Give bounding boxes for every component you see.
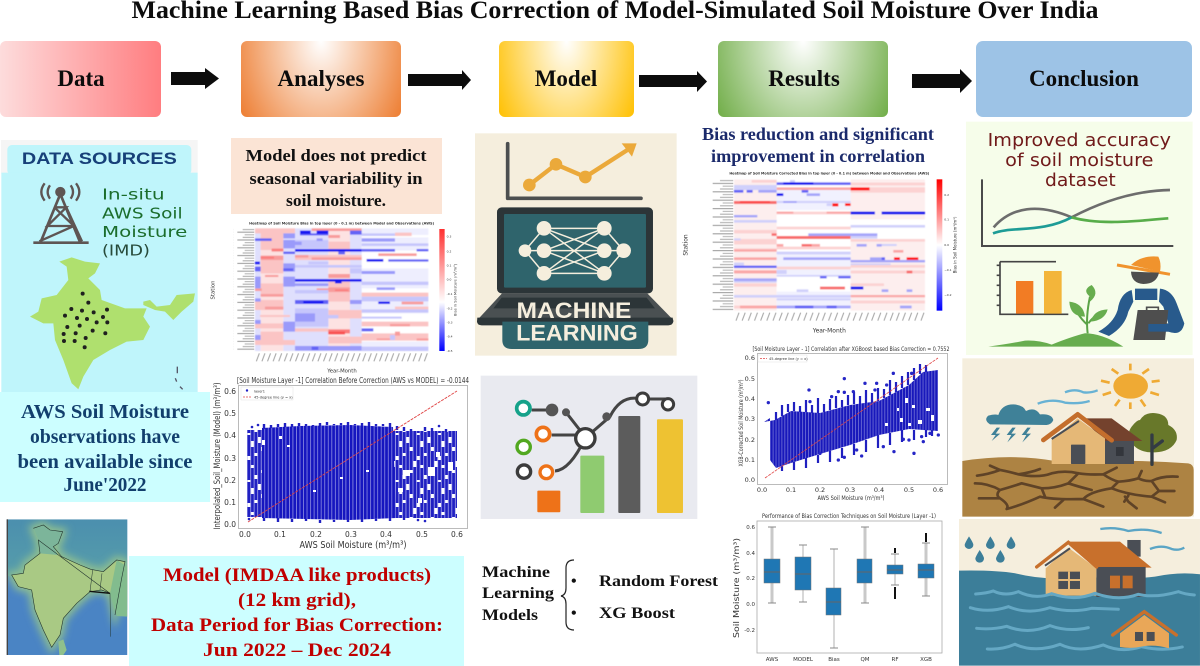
text: machine learning models list: Machine xyxy=(482,564,550,581)
arrow: Model to Results xyxy=(639,71,707,92)
text: machine learning models list: Learning xyxy=(482,585,554,602)
scatter: before correction: [Soil Moisture Layer -1] Correlation Before Correction (AWS vs MODEL) = -0.0144 xyxy=(237,376,469,385)
text panel: AWS availability: AWS Soil Moisture xyxy=(21,402,189,423)
illustration: ML network and bars xyxy=(481,376,697,519)
arrow: Results to Conclusion xyxy=(912,69,972,93)
heatmap: bias before correction: Station xyxy=(210,281,216,299)
header: Data: Data xyxy=(57,66,105,91)
icon: plant xyxy=(988,285,1123,347)
text: improved accuracy: dataset xyxy=(1045,171,1116,191)
scatter: before correction: 0.5 xyxy=(224,409,236,418)
scatter: after XGBoost correction: 0.1 xyxy=(786,486,796,494)
heatmap: bias before correction: 0.3 xyxy=(447,235,451,239)
scatter: before correction: 0.5 xyxy=(416,530,428,539)
heatmap: corrected bias: 0.0 xyxy=(944,243,949,247)
panel: data sources xyxy=(1,140,198,393)
scatter: after XGBoost correction: 0.1 xyxy=(745,456,755,464)
text: machine learning models list: Models xyxy=(482,607,538,624)
illustration: flood scene xyxy=(959,519,1200,666)
heatmap: bias before correction: -0.2 xyxy=(447,306,453,310)
heading: data sources: DATA SOURCES xyxy=(22,149,177,168)
text panel: AWS availability: been available since xyxy=(18,452,193,473)
scatter: before correction: 0.3 xyxy=(224,454,236,463)
callout: model seasonal variability xyxy=(231,138,442,214)
heatmap: corrected bias: Bias in Soil Moisture (m³/m³) xyxy=(953,216,958,273)
icon: flooded house large xyxy=(1037,540,1152,597)
icon: flooded house small xyxy=(1113,612,1176,648)
header: Conclusion xyxy=(976,41,1192,117)
text: in-situ AWS: Moisture xyxy=(102,223,187,241)
heatmap: corrected bias: 0.2 xyxy=(944,193,949,197)
box plot: bias correction performance: MODEL xyxy=(793,657,814,663)
scatter: before correction: 0.2 xyxy=(224,476,236,485)
header: Model xyxy=(499,41,634,117)
box plot: bias correction performance: AWS xyxy=(766,657,779,663)
scatter: after XGBoost correction: 0.0 xyxy=(745,476,755,484)
scatter: after XGBoost correction: 45-degree line (y = x) xyxy=(769,357,808,361)
header: Results: Results xyxy=(768,66,840,91)
icon: storm cloud xyxy=(986,404,1053,442)
scatter: after XGBoost correction: AWS Soil Moisture (m³/m³) xyxy=(818,494,884,502)
text panel: model description: Jun 2022 – Dec 2024 xyxy=(203,640,392,661)
text: in-situ AWS xyxy=(102,185,187,260)
heatmap: bias before correction: Bias in Soil Moisture (m³/m³) xyxy=(454,263,458,316)
text: machine learning models list: Random Forest xyxy=(599,573,719,590)
heatmap: corrected bias: −0.1 xyxy=(944,268,952,272)
heatmap: bias before correction: 0.1 xyxy=(447,263,451,267)
heatmap: bias before correction: Year-Month xyxy=(326,368,357,374)
box plot: bias correction performance: XGB xyxy=(920,657,932,663)
text: machine learning models list xyxy=(482,560,719,630)
icon: sun xyxy=(1101,364,1160,409)
text: machine learning models list: • xyxy=(571,573,577,590)
scatter: after XGBoost correction: 0.3 xyxy=(745,415,755,423)
text: results heading: improvement in correlation xyxy=(711,146,925,166)
text panel: AWS availability: June'2022 xyxy=(64,475,146,496)
icon: wind lines xyxy=(1038,390,1098,404)
scatter: before correction: 0.4 xyxy=(224,431,236,440)
heatmap: bias before correction: -0.5 xyxy=(447,349,453,353)
text panel: AWS availability xyxy=(0,392,210,502)
panel: improved accuracy conclusion xyxy=(966,122,1193,355)
heatmap: bias before correction: -0.4 xyxy=(447,335,453,339)
text: machine learning models list: XG Boost xyxy=(599,605,676,622)
heatmap: corrected bias: Year-Month xyxy=(812,328,846,335)
header: Model: Model xyxy=(535,66,597,91)
scatter: after XGBoost correction: 0.4 xyxy=(745,395,755,403)
scatter: before correction: 0.1 xyxy=(224,498,236,507)
scatter: before correction: 0.6 xyxy=(224,387,236,396)
box plot: bias correction performance: 0.6 xyxy=(746,525,755,531)
scatter: after XGBoost correction: 0.0 xyxy=(757,486,767,494)
icon: laptop with neural network: LEARNING xyxy=(516,321,638,346)
scatter: before correction: 0.2 xyxy=(310,530,322,539)
header: Results xyxy=(718,41,888,117)
bar chart xyxy=(997,262,1068,314)
icon: tree xyxy=(1129,413,1177,464)
header: Analyses: Analyses xyxy=(278,66,364,91)
scatter: after XGBoost correction: [Soil Moisture Layer - 1] Correlation after XGBoost based Bias Correction = 0.7552 xyxy=(752,345,950,353)
arrow: Data to Analyses xyxy=(171,68,219,89)
scatter: after XGBoost correction: 0.2 xyxy=(745,436,755,444)
icon: tower xyxy=(33,183,89,243)
box plot: bias correction performance: RF xyxy=(892,657,898,663)
water ripples xyxy=(970,591,1194,650)
text: improved accuracy: Improved accuracy xyxy=(988,131,1171,151)
scatter: before correction: 0.3 xyxy=(345,530,357,539)
heatmap: corrected bias: −0.2 xyxy=(944,293,952,297)
text: in-situ AWS: (IMD) xyxy=(102,242,150,260)
text panel: model description xyxy=(129,556,464,666)
scatter: before correction: layer1 xyxy=(254,390,265,394)
scatter: before correction: 0.0 xyxy=(224,520,236,529)
box plot: bias correction performance: Performance of Bias Correction Techniques on Soil Moisture (Layer -1) xyxy=(762,512,936,520)
callout: model seasonal variability: Model does not predict xyxy=(246,146,427,165)
heatmap: corrected bias xyxy=(682,172,958,335)
scatter: after XGBoost correction: 0.5 xyxy=(745,375,755,383)
scatter: before correction: 0.1 xyxy=(274,530,286,539)
heatmap: bias before correction: 0.0 xyxy=(447,278,451,282)
text panel: model description: Model (IMDAA like products) xyxy=(163,565,431,586)
scatter: before correction xyxy=(213,376,469,551)
icon: farmer xyxy=(1098,256,1184,340)
scatter: before correction: 0.6 xyxy=(451,530,463,539)
scatter: before correction: AWS Soil Moisture (m³/m³) xyxy=(300,540,407,551)
heatmap: bias before correction xyxy=(210,221,458,374)
header: Data xyxy=(0,41,161,117)
heatmap: corrected bias: 0.1 xyxy=(944,218,949,222)
icon: laptop with neural network xyxy=(477,207,673,349)
scatter: after XGBoost correction xyxy=(737,345,950,502)
header: Analyses xyxy=(241,41,401,117)
scatter: before correction: Interpolated_Soil_Moisture (Model) (m³/m³) xyxy=(213,382,223,530)
box plot: bias correction performance: Bias xyxy=(828,657,840,663)
box plot: bias correction performance: 0.4 xyxy=(746,551,755,557)
text panel: AWS availability: observations have xyxy=(30,427,180,448)
text: results heading xyxy=(702,124,934,166)
text: improved accuracy: of soil moisture xyxy=(1005,151,1153,171)
scatter: after XGBoost correction: 0.6 xyxy=(745,354,755,362)
icon: house xyxy=(1043,414,1142,464)
scatter: after XGBoost correction: 0.3 xyxy=(845,486,855,494)
scatter: after XGBoost correction: 0.4 xyxy=(874,486,884,494)
box plot: bias correction performance: QM xyxy=(860,657,870,663)
icon: wind lines xyxy=(1100,528,1184,550)
heatmap: bias before correction: Heatmap of Soil Moisture Bias in top layer (0 - 0.1 m) between Model and Observations (AWS) xyxy=(249,221,435,225)
scatter: after XGBoost correction: 0.5 xyxy=(904,486,914,494)
heatmap: bias before correction: 0.2 xyxy=(447,249,451,253)
box plot: bias correction performance: 0.0 xyxy=(746,602,755,608)
text: in-situ AWS: In-situ xyxy=(102,185,165,203)
illustration: machine learning laptop xyxy=(475,133,677,356)
cracked ground xyxy=(975,466,1178,509)
icon: laptop with neural network: MACHINE xyxy=(516,298,631,323)
header: Conclusion: Conclusion xyxy=(1029,66,1139,91)
scatter: after XGBoost correction: 0.2 xyxy=(815,486,825,494)
callout: model seasonal variability: seasonal variability in xyxy=(250,169,423,188)
box plot: bias correction performance xyxy=(732,512,942,663)
scatter: after XGBoost correction: 0.6 xyxy=(933,486,943,494)
text: improved accuracy xyxy=(988,131,1171,191)
scatter: before correction: 0.0 xyxy=(239,530,251,539)
heatmap: corrected bias: Heatmap of Soil Moisture Corrected Bias in top layer (0 - 0.1 m) between Model and Observations (AWS) xyxy=(729,172,930,176)
map: model grid India xyxy=(7,519,127,655)
box plot: bias correction performance: 0.2 xyxy=(746,576,755,582)
text panel: model description: Data Period for Bias Correction: xyxy=(151,615,443,636)
text: in-situ AWS: AWS Soil xyxy=(102,205,183,223)
icon: growth chart xyxy=(508,143,641,198)
scatter: after XGBoost correction: XGB-Corrected Soil Moisture (m³/m³) xyxy=(737,380,745,466)
illustration: drought scene xyxy=(962,358,1194,517)
text: machine learning models list: • xyxy=(571,605,577,622)
icon: rain drops xyxy=(965,536,1015,563)
callout: model seasonal variability: soil moisture. xyxy=(286,191,386,210)
line chart xyxy=(982,179,1173,246)
scatter: before correction: 0.4 xyxy=(380,530,392,539)
heatmap: bias before correction: -0.3 xyxy=(447,320,453,324)
heatmap: bias before correction: -0.1 xyxy=(447,292,453,296)
map: India with stations xyxy=(30,257,195,389)
heatmap: corrected bias: Station xyxy=(682,234,689,256)
scatter: before correction: 45-degree line (y = x) xyxy=(254,396,293,400)
text panel: model description: (12 km grid), xyxy=(238,590,356,611)
arrow: Analyses to Model xyxy=(408,70,471,90)
box plot: bias correction performance: -0.2 xyxy=(744,628,755,634)
box plot: bias correction performance: Soil Moisture (m³/m³) xyxy=(732,538,741,638)
text: results heading: Bias reduction and significant xyxy=(702,124,934,144)
